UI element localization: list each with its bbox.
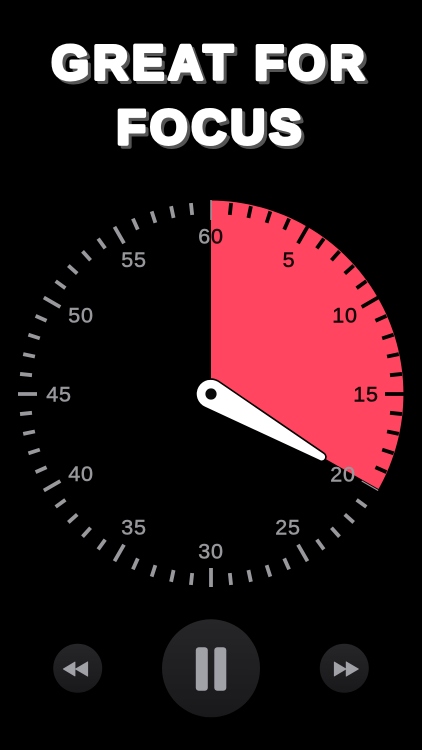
minute labels: 45 xyxy=(46,382,72,406)
minute labels: 55 xyxy=(121,248,147,272)
minute labels: 60 xyxy=(198,224,224,248)
minute labels: 35 xyxy=(121,516,147,540)
minute labels xyxy=(46,224,379,564)
timer hand xyxy=(197,380,325,460)
minute labels: 30 xyxy=(198,540,224,564)
button: rewind xyxy=(53,644,102,693)
grey ticks xyxy=(18,200,378,587)
pink elapsed sector xyxy=(211,200,403,489)
title xyxy=(52,37,368,154)
minute labels: 10 xyxy=(332,304,358,328)
button: fast forward xyxy=(320,644,369,693)
minute labels: 25 xyxy=(275,516,301,540)
title: GREAT FOR xyxy=(52,37,368,90)
minute labels: 5 xyxy=(283,248,295,272)
timer dial xyxy=(18,200,404,587)
button: pause xyxy=(162,619,260,717)
minute labels: 40 xyxy=(68,462,94,486)
minute labels: 20 xyxy=(330,462,356,486)
title: FOCUS xyxy=(116,102,306,154)
dark ticks on the sector xyxy=(230,203,404,472)
minute labels: 50 xyxy=(68,304,94,328)
minute labels: 15 xyxy=(353,382,379,406)
